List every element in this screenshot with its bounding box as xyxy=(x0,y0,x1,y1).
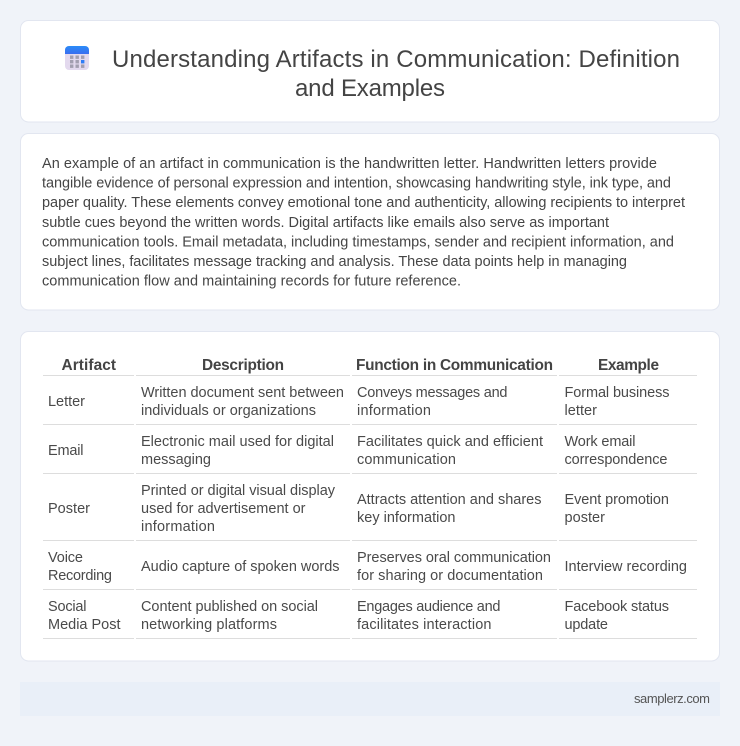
icon: calendar xyxy=(65,46,89,70)
table row: Poster: Event promotion xyxy=(564,492,669,508)
text block: paragraph xyxy=(42,156,685,290)
table header row xyxy=(43,357,697,376)
table row: Social Media Post xyxy=(43,599,697,638)
table row: Social Media Post: Facebook status xyxy=(564,599,669,615)
footer bar xyxy=(20,682,720,716)
table header row: Artifact xyxy=(62,357,116,374)
table row: Social Media Post: update xyxy=(564,617,608,633)
table row: Email: Facilitates quick and efficient xyxy=(357,434,543,450)
text block: paragraph: subject lines, facilitates message tracking and analysis. These data points help in managing xyxy=(42,254,627,270)
table row: Letter: letter xyxy=(564,403,597,419)
text block: paragraph: paper quality. These elements convey emotional tone and authenticity, allowing recipients to interpret xyxy=(42,195,685,211)
panel: intro paragraph xyxy=(20,134,720,310)
table row: Social Media Post: facilitates interaction xyxy=(357,617,492,633)
table row: Letter: Letter xyxy=(48,394,85,410)
table row: Email: Work email xyxy=(564,434,636,450)
table row: Email: correspondence xyxy=(564,452,668,468)
table row: Poster xyxy=(43,483,697,540)
table row: Voice Recording: Voice xyxy=(48,550,83,566)
footer text: site name: samplerz.com xyxy=(634,691,710,706)
table row: Voice Recording: Preserves oral communication xyxy=(357,550,551,566)
table row: Voice Recording: Audio capture of spoken words xyxy=(141,559,340,575)
table row: Letter xyxy=(43,385,697,424)
panel: title header xyxy=(20,20,720,122)
table header row: Function in Communication xyxy=(356,357,553,374)
table row: Email: Electronic mail used for digital xyxy=(141,434,334,450)
text block: paragraph: An example of an artifact in communication is the handwritten letter. Handwritten letters provide xyxy=(42,156,657,172)
table row: Poster: Poster xyxy=(48,501,90,517)
table row: Voice Recording xyxy=(43,550,697,590)
table row: Poster: used for advertisement or xyxy=(141,501,306,517)
text block: paragraph: communication flow and maintaining records for future reference. xyxy=(42,274,461,290)
table row: Social Media Post: Social xyxy=(48,599,86,615)
table row: Email: messaging xyxy=(141,452,211,468)
table row: Email: communication xyxy=(357,452,456,468)
table row: Poster: key information xyxy=(357,510,456,526)
table row: Voice Recording: Recording xyxy=(48,568,112,584)
table row: Letter: Written document sent between xyxy=(141,385,344,401)
table row: Letter: individuals or organizations xyxy=(141,403,316,419)
table row: Poster: Printed or digital visual display xyxy=(141,483,336,499)
table header row: Description xyxy=(202,357,284,374)
table row: Poster: information xyxy=(141,519,215,535)
table row: Letter: Conveys messages and xyxy=(357,385,508,401)
table row: Social Media Post: Content published on social xyxy=(141,599,318,615)
table row: Email xyxy=(43,434,697,474)
text block: paragraph: tangible evidence of personal expression and intention, showcasing handwriting style, ink type, and xyxy=(42,176,671,192)
table header row: Example xyxy=(598,357,659,374)
table row: Letter: Formal business xyxy=(564,385,670,401)
text block: paragraph: subtle cues beyond the written words. Digital artifacts like emails also serve as important xyxy=(42,215,609,231)
table row: Voice Recording: Interview recording xyxy=(564,559,687,575)
table row: Social Media Post: Media Post xyxy=(48,617,120,633)
title xyxy=(112,46,680,102)
table row: Email: Email xyxy=(48,443,84,459)
title: Understanding Artifacts in Communication: Definition xyxy=(112,46,680,73)
panel: artifacts table xyxy=(20,332,720,661)
table row: Poster: poster xyxy=(564,510,605,526)
title: and Examples xyxy=(295,75,445,102)
text block: paragraph: communication tools. Email metadata, including timestamps, sender and recipient information, and xyxy=(42,234,674,250)
table row: Social Media Post: Engages audience and xyxy=(357,599,500,615)
table row: Voice Recording: for sharing or documentation xyxy=(357,568,543,584)
table row: Social Media Post: networking platforms xyxy=(141,617,277,633)
table row: Poster: Attracts attention and shares xyxy=(357,492,542,508)
table row: Letter: information xyxy=(357,403,431,419)
